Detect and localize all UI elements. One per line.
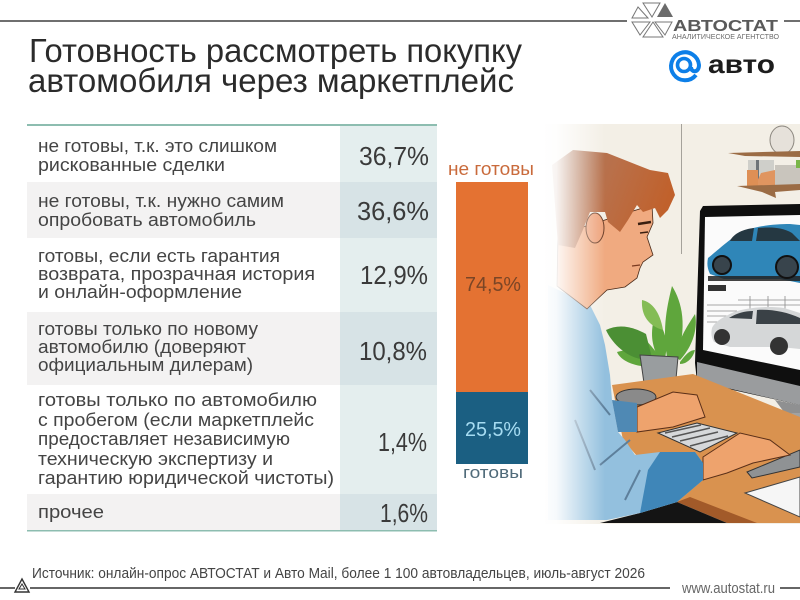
- plant: [606, 286, 696, 366]
- notepad: [745, 477, 800, 517]
- row: guarantee: и онлайн-оформление: [38, 282, 242, 302]
- source note: Источник: онлайн-опрос АВТОСТАТ и Авто Mail, более 1 100 автовладельцев, июль-август 2026: [32, 566, 645, 582]
- title: [28, 32, 522, 99]
- row: new cars: готовы только по новому: [38, 319, 258, 339]
- row: guarantee: возврата, прозрачная история: [38, 264, 315, 284]
- website: www.autostat.ru: [681, 580, 775, 597]
- shelves: [728, 126, 800, 198]
- left image fade: [540, 120, 605, 530]
- row: other: прочее: [38, 502, 104, 522]
- row: used cars: [38, 385, 437, 494]
- listing lines: [707, 285, 800, 322]
- monitor: [695, 204, 800, 445]
- keyboard: [658, 423, 800, 478]
- row: new cars: официальным дилерам): [38, 355, 253, 375]
- mouse: [616, 389, 656, 405]
- row: test the car: 36,6%: [357, 196, 429, 226]
- stacked bar chart: готовы: [463, 463, 523, 482]
- row: new cars: [27, 312, 437, 385]
- row: test the car: не готовы, т.к. нужно самим: [38, 191, 284, 211]
- logo: АВТОСТАТ: АНАЛИТИЧЕСКОЕ АГЕНТСТВО: [672, 34, 780, 41]
- row: risky deals: 36,7%: [359, 141, 429, 171]
- illustration: man at computer browsing cars: [540, 120, 800, 530]
- silver car: [711, 307, 800, 355]
- logo: Авто Mail: [671, 49, 775, 80]
- man: head: [552, 150, 675, 309]
- row: guarantee: 12,9%: [360, 260, 428, 290]
- hands: [637, 392, 790, 480]
- title: Готовность рассмотреть покупку: [29, 32, 522, 69]
- row: used cars: предоставляет независимую: [38, 429, 290, 449]
- row: new cars: 10,8%: [359, 336, 427, 366]
- table of reasons: [27, 124, 437, 532]
- logo: Авто Mail: авто: [708, 49, 775, 79]
- row: used cars: 1,4%: [378, 427, 427, 457]
- row: other: [27, 494, 437, 530]
- row: new cars: автомобилю (доверяют: [38, 337, 246, 357]
- logo: АВТОСТАТ: [632, 3, 780, 41]
- stacked bar chart: 25,5%: [465, 419, 521, 441]
- row: risky deals: рискованные сделки: [38, 155, 225, 175]
- blue car: [707, 224, 800, 283]
- footer rule and mark: [0, 579, 800, 592]
- plant pot: [640, 355, 678, 390]
- row: guarantee: [38, 238, 437, 312]
- row: used cars: с пробегом (если маркетплейс: [38, 410, 314, 430]
- row: other: 1,6%: [380, 498, 428, 528]
- row: test the car: опробовать автомобиль: [38, 210, 256, 230]
- row: guarantee: готовы, если есть гарантия: [38, 246, 280, 266]
- row: risky deals: не готовы, т.к. это слишком: [38, 136, 277, 156]
- logo: АВТОСТАТ: АВТОСТАТ: [673, 18, 778, 35]
- stacked bar chart: не готовы: [448, 159, 534, 179]
- row: risky deals: [38, 126, 437, 182]
- row: used cars: готовы только по автомобилю: [38, 390, 317, 410]
- row: used cars: техническую экспертизу и: [38, 449, 273, 469]
- row: test the car: [27, 182, 437, 238]
- man: shirt: [548, 285, 703, 520]
- header rule: [0, 20, 800, 22]
- stacked bar chart: [448, 159, 534, 482]
- desk: [600, 374, 800, 523]
- row: used cars: гарантию юридической чистоты): [38, 468, 334, 488]
- stacked bar chart: 74,5%: [465, 274, 521, 296]
- title: автомобиля через маркетплейс: [28, 62, 514, 99]
